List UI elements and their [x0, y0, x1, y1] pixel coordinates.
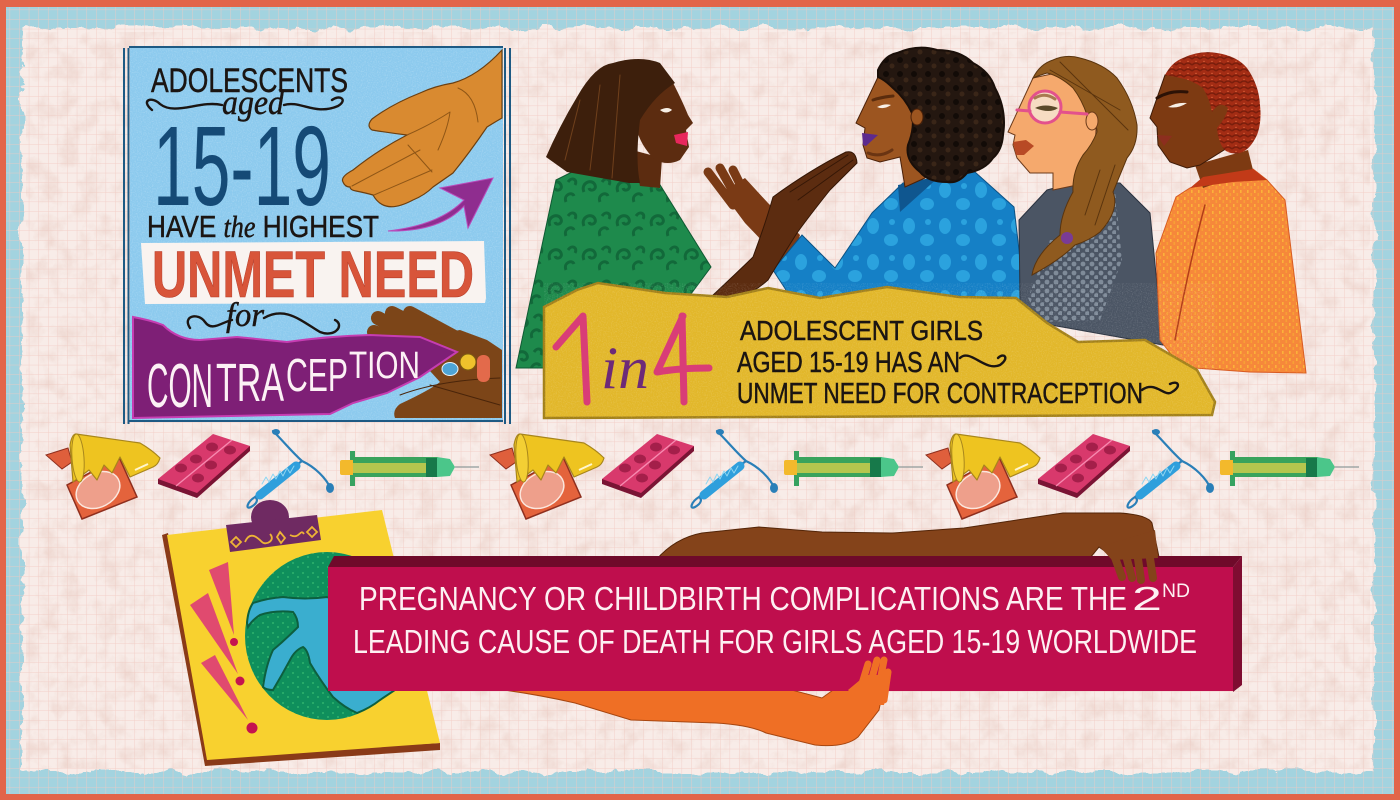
banner: contraception: CON	[147, 352, 213, 421]
hand: brown fingers over sign	[1100, 530, 1158, 580]
hand: open palm	[708, 168, 800, 270]
heading: adolescents: ADOLESCENTS	[151, 62, 348, 100]
poster: unmet need for contraception	[124, 47, 510, 424]
banner: contraception: CEP	[286, 349, 348, 401]
person: green dress	[516, 59, 711, 368]
banner: contraception: TRA	[216, 353, 284, 413]
row 1: contraceptive icons	[46, 429, 479, 519]
icon: clip	[226, 500, 321, 552]
icon: purple arrow	[388, 178, 493, 231]
row 2: contraceptive icons	[490, 429, 923, 519]
icon: exclamation marks	[190, 562, 258, 734]
heading: aged with flourish: aged	[222, 83, 284, 122]
person: grey sweater and glasses	[1008, 56, 1163, 345]
heading: aged with flourish	[147, 83, 343, 122]
hand: orange fingers over sign	[848, 660, 890, 705]
highlight: unmet need: UNMET NEED	[152, 237, 474, 311]
statistic: 1 in 4 numerals	[556, 316, 709, 402]
statistic: 1 in 4 numerals: in	[601, 335, 649, 401]
person: arm and gesturing hand	[711, 152, 857, 300]
heading: for with flourish: for	[226, 297, 265, 334]
text: pregnancy statement: 2	[1132, 580, 1162, 617]
icon: reaching hand	[342, 50, 502, 207]
text: pregnancy statement: ND	[1162, 581, 1190, 602]
row 3: contraceptive icons	[926, 429, 1359, 519]
arm: brown arm over sign	[656, 513, 1159, 560]
banner: contraception: TION	[349, 345, 420, 387]
heading: have the highest: HAVE the HIGHEST	[147, 209, 379, 244]
text: adolescent girls stat: AGED 15-19 HAS AN	[737, 347, 960, 379]
heading: 15-19: 15-19	[153, 103, 331, 229]
text: adolescent girls stat	[737, 315, 1178, 410]
icon: hand holding pills	[374, 313, 502, 418]
text: pregnancy statement: PREGNANCY OR CHILDBIRTH COMPLICATIONS ARE THE	[359, 580, 1127, 617]
banner: contraception	[133, 317, 457, 421]
callout: 1 in 4	[544, 283, 1215, 418]
heading: for with flourish	[188, 297, 339, 334]
icon: globe	[245, 552, 409, 720]
text: pregnancy statement: LEADING CAUSE OF DEATH FOR GIRLS AGED 15-19 WORLDWIDE	[353, 623, 1197, 660]
person: orange top	[1150, 52, 1306, 373]
person: blue top	[708, 48, 1026, 310]
clipboard with globe	[162, 500, 440, 766]
text: adolescent girls stat: ADOLESCENT GIRLS	[740, 315, 983, 346]
text: adolescent girls stat: UNMET NEED FOR CONTRACEPTION	[737, 378, 1143, 410]
text: pregnancy statement	[353, 580, 1197, 660]
arm: orange arm under sign	[504, 680, 885, 746]
banner: red sign with death statistic	[328, 556, 1242, 692]
